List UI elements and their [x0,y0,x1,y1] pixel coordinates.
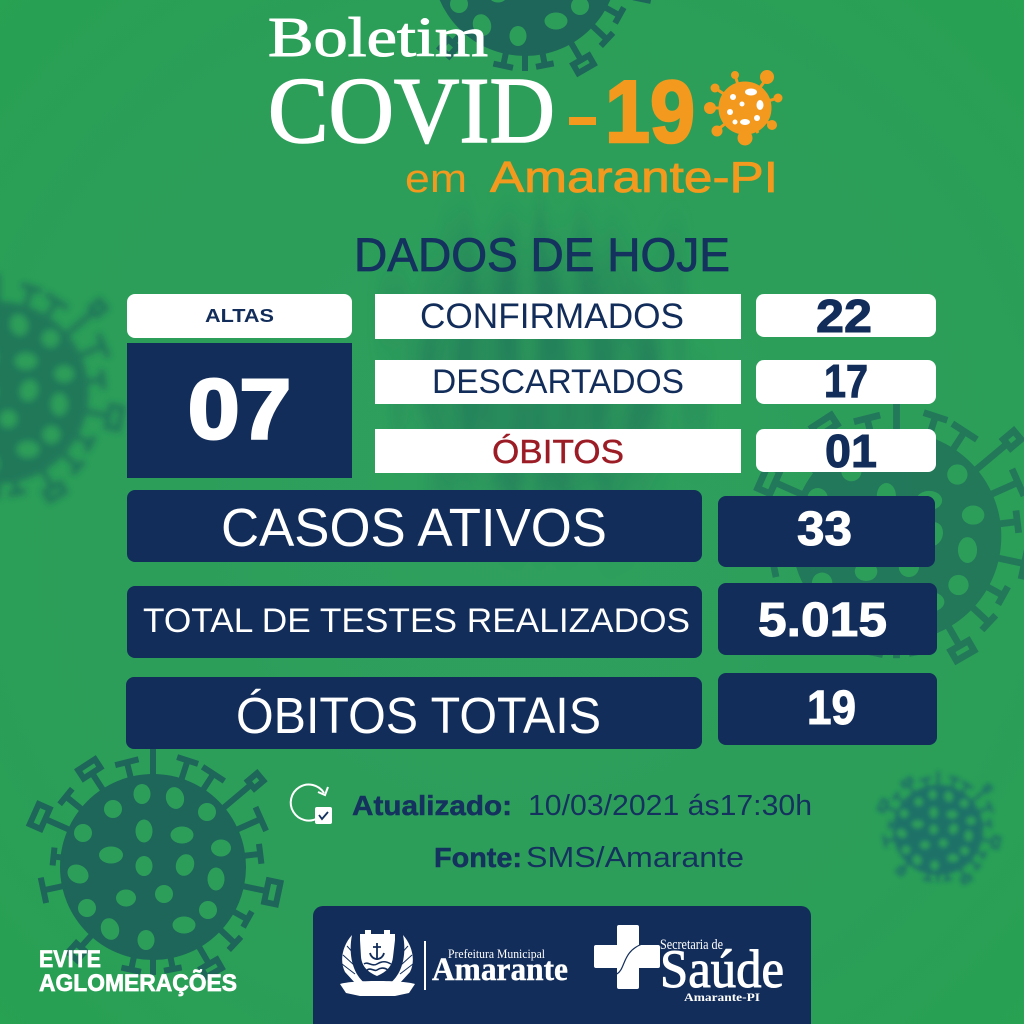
row: obitos totais [126,673,937,749]
total de testes value: 5.015 [758,594,887,647]
row: total de testes [127,583,937,658]
icon: refresh with check [291,785,332,824]
virus: small blurred bottom right decoration [878,771,1000,883]
callout line 2: AGLOMERAÇÕES [39,969,237,997]
text: Saude: Saúde [660,939,784,999]
title [268,7,778,202]
obitos totais label: ÓBITOS TOTAIS [236,687,601,744]
callout line 1: EVITE [39,946,101,973]
icon: orange virus [704,70,782,145]
descartados label: DESCARTADOS [432,363,684,401]
divider [424,941,426,990]
source label: Fonte: [434,842,522,873]
virus: bottom left decoration [30,746,280,977]
total de testes label: TOTAL DE TESTES REALIZADOS [143,602,690,640]
panel: footer logos [313,906,811,1024]
source text [434,842,744,874]
subtitle: Amarante-PI: Amarante-PI [490,153,778,202]
update text [352,790,812,822]
title line: COVID: COVID [268,59,555,163]
text: Amarante-PI: Amarante-PI [684,990,760,1004]
casos ativos value: 33 [797,503,852,556]
descartados value: 17 [824,355,868,407]
subtitle: em: em [405,157,467,201]
virus: right decoration [758,400,1024,661]
row: obitos [375,425,936,477]
virus: top decoration [402,0,652,73]
row: confirmados [375,290,936,342]
confirmados label: CONFIRMADOS [420,297,684,336]
virus: left decoration [0,274,123,501]
altas label text: ALTAS [205,306,274,326]
icon: health cross [594,925,660,989]
text: Amarante: Amarante [432,952,568,988]
row: casos ativos [127,490,935,567]
text: Prefeitura Municipal: Prefeitura Municipal [448,946,545,961]
source value: SMS/Amarante [526,842,744,874]
heading: DADOS DE HOJE: DADOS DE HOJE [354,228,730,281]
title dash [569,117,596,125]
altas number: 07 [188,362,291,456]
update label: Atualizado: [352,790,512,821]
panel: altas label [127,294,352,338]
casos ativos label: CASOS ATIVOS [221,498,607,558]
obitos totais value: 19 [807,682,856,735]
title number: 19: 19 [605,62,695,161]
icon: municipal crest [340,930,415,996]
confirmados value: 22 [816,290,872,342]
virus: faint blurred centre decoration [379,217,707,519]
row: descartados [375,355,936,407]
update date: 10/03/2021 ás17:30h [528,790,812,822]
callout: evite aglomeracoes [39,946,237,997]
obitos value: 01 [825,425,877,477]
panel: altas value [127,343,352,478]
title line: Boletim: Boletim [268,7,488,69]
text: Secretaria de: Secretaria de [660,937,723,953]
obitos label: ÓBITOS [492,433,624,470]
